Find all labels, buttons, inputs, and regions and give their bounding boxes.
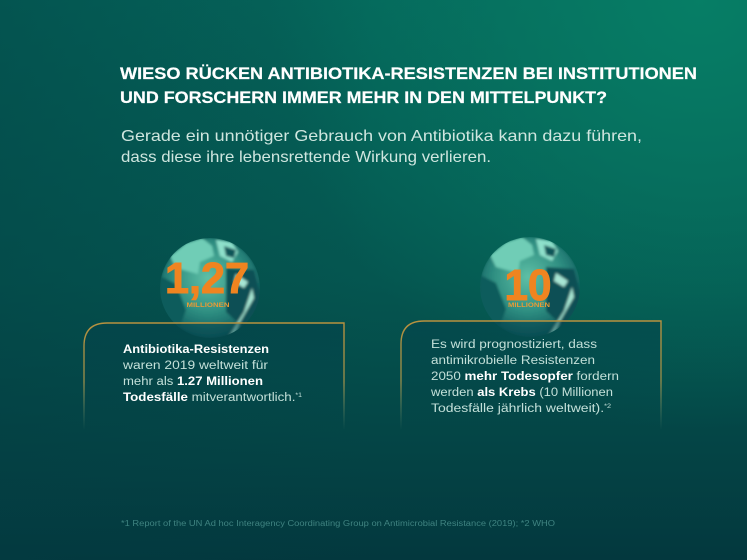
intro text: dass diese ihre lebensrettende Wirkung verlieren. (121, 149, 491, 166)
globe left (158, 238, 262, 338)
title: UND FORSCHERN IMMER MEHR IN DEN MITTELPUNKT? (120, 88, 607, 107)
stat: 10 Millionen: MILLIONEN (508, 302, 550, 309)
panel text: left: *1 (295, 393, 303, 399)
panel text: left (122, 344, 303, 404)
panel text: left: Todesfälle mitverantwortlich. (123, 392, 281, 404)
stat: 1,27 Millionen: MILLIONEN (186, 302, 230, 309)
panel text: right: Es wird prognostiziert, dass (431, 339, 597, 351)
stat: 1,27 Millionen: 1,27 (165, 254, 249, 303)
intro text: Gerade ein unnötiger Gebrauch von Antibiotika kann dazu führen, (121, 128, 642, 145)
panel text: right: *2 (604, 404, 612, 410)
panel text: left: mehr als 1.27 Millionen (123, 376, 263, 388)
panel: Prognose 2050 (401, 321, 661, 430)
stat: 10 Millionen: 10 (504, 261, 552, 310)
panel text: right: 2050 mehr Todesopfer fordern (431, 371, 619, 383)
panel text: right: Todesfälle jährlich weltweit). (431, 403, 574, 415)
panel text: right: werden als Krebs (10 Millionen (430, 387, 613, 399)
footnote: *1 Report of the UN Ad hoc Interagency Coordinating Group on Antimicrobial Resistance (2019); *2 WHO (121, 519, 555, 528)
panel text: right: antimikrobielle Resistenzen (431, 355, 595, 367)
panel text: left: Antibiotika-Resistenzen (123, 344, 269, 356)
panel text: right (430, 339, 619, 415)
panel: Antibiotika-Resistenzen (84, 323, 344, 430)
title: WIESO RÜCKEN ANTIBIOTIKA-RESISTENZEN BEI INSTITUTIONEN (120, 64, 697, 83)
globe right (478, 237, 582, 337)
intro text (121, 128, 642, 166)
title (120, 64, 697, 107)
panel text: left: waren 2019 weltweit für (122, 360, 268, 372)
